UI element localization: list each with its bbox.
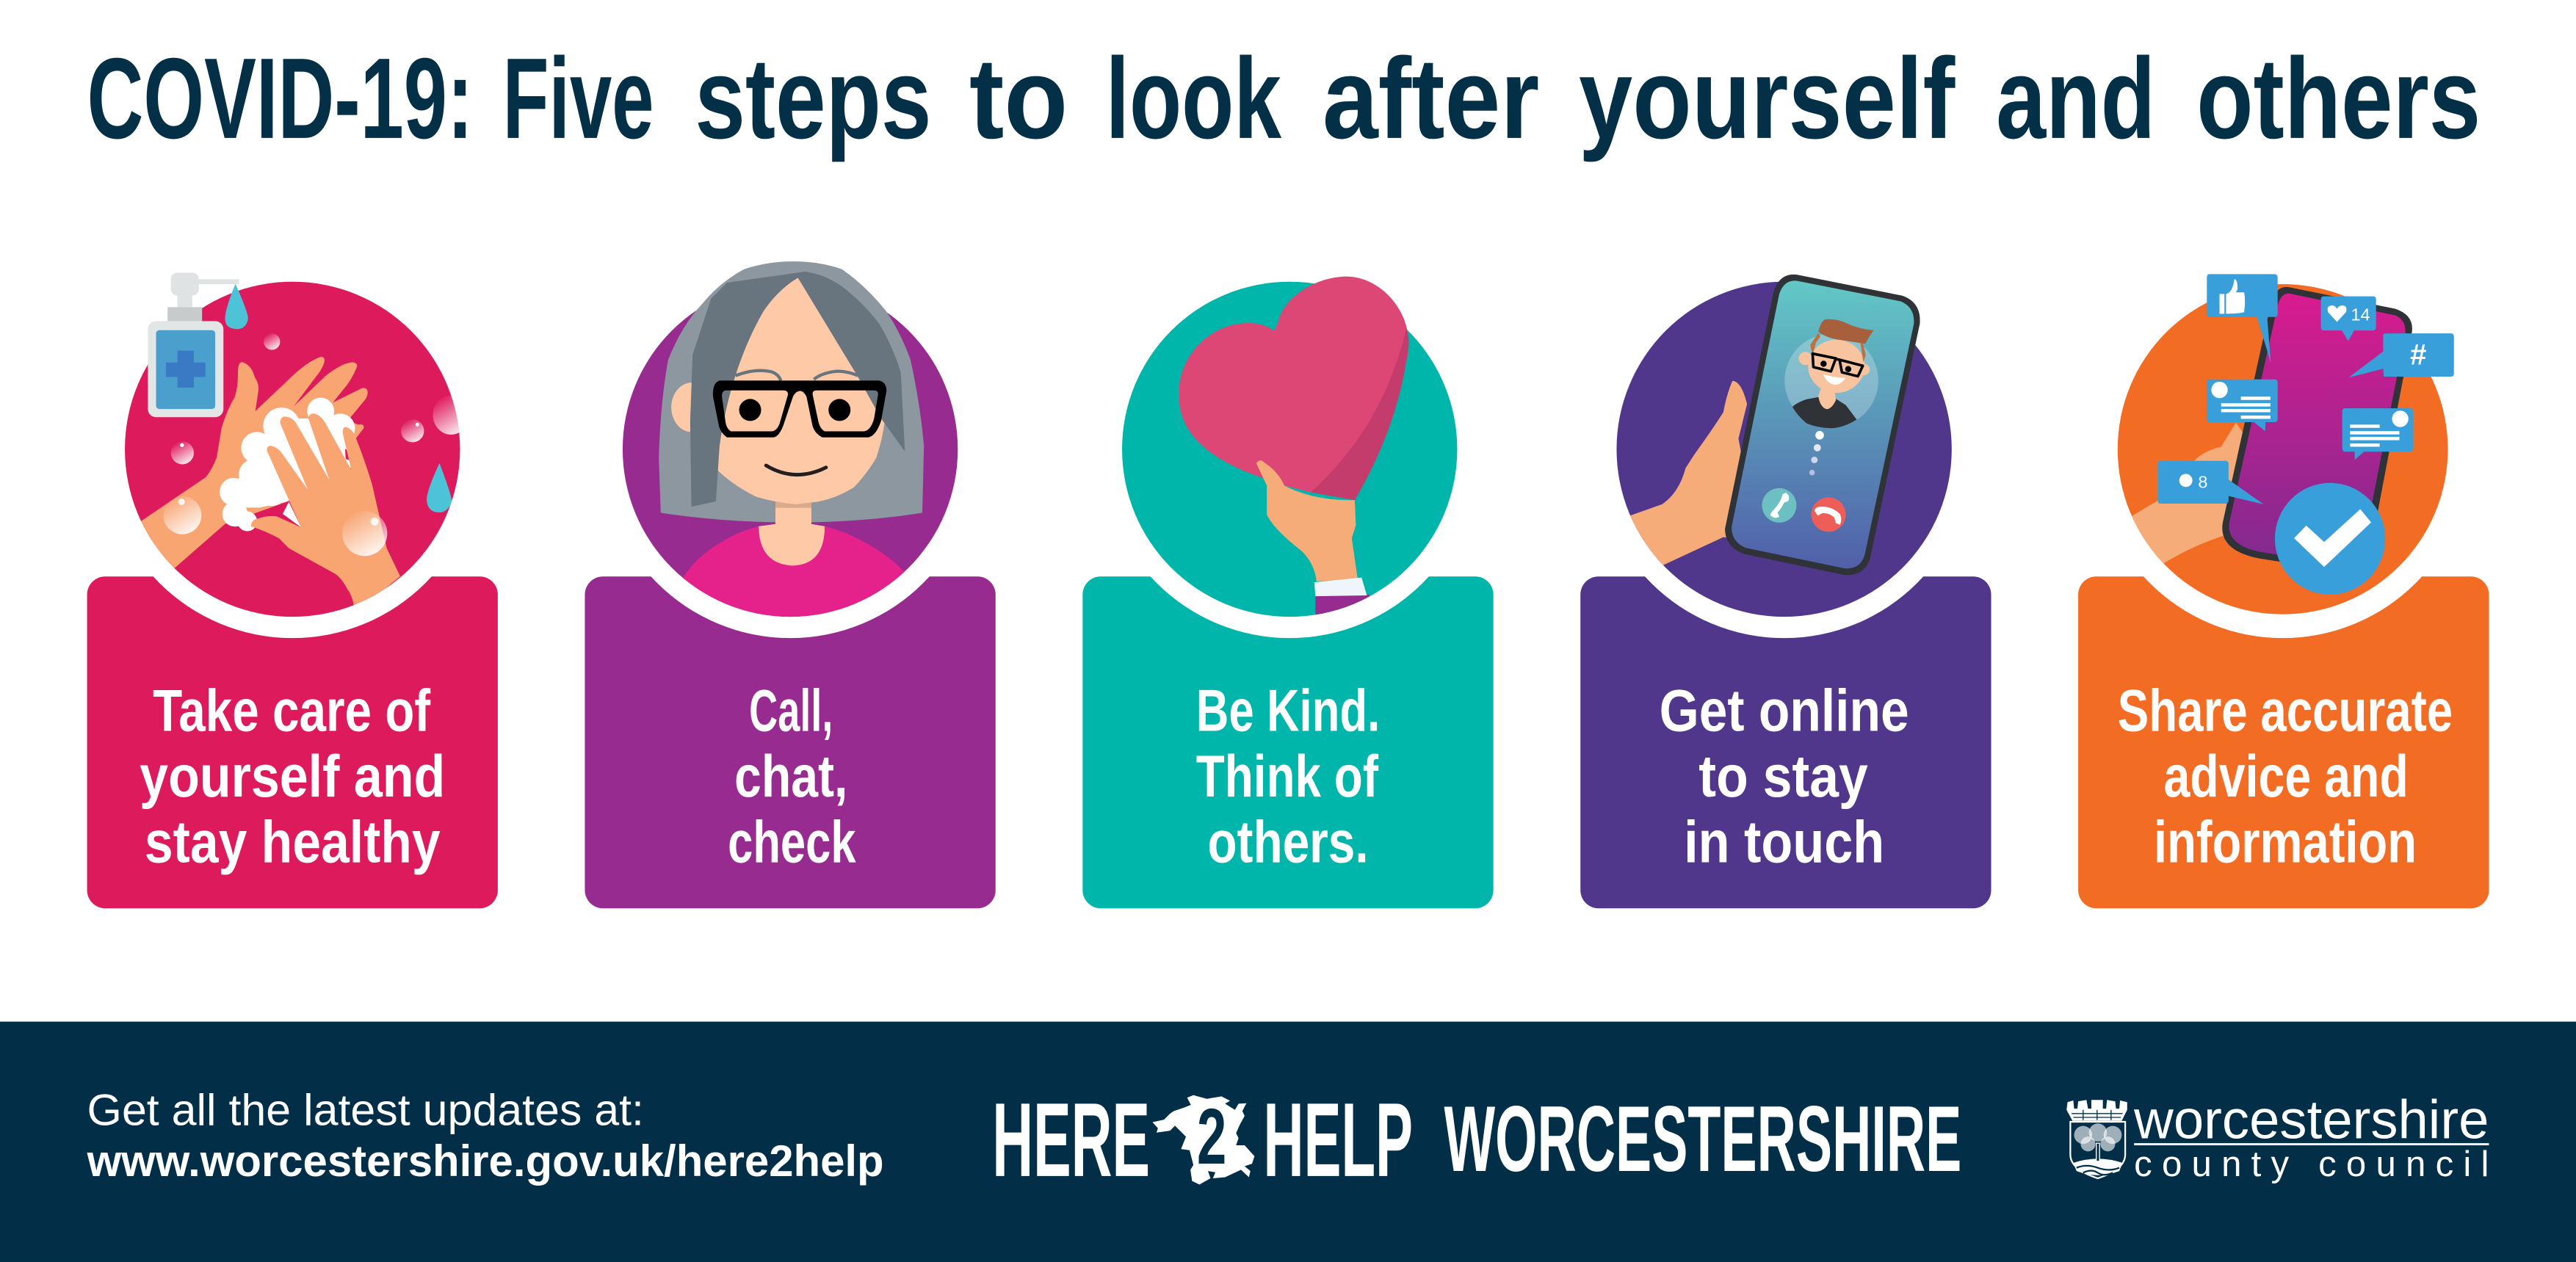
icon: soap drop [225,284,248,329]
icon: county map with 2 [1152,1092,1254,1185]
caption: take care: stay healthy [145,810,441,876]
icon: crest [2066,1100,2127,1178]
bubble: like [2207,274,2278,363]
bubble: 14 likes [2321,297,2376,341]
logo: worcestershire county council [2066,1089,2489,1184]
icon: county map with 2: 2 [1197,1092,1226,1181]
title: and [1996,35,2155,163]
caption: share accurate: Share accurate [2118,678,2453,744]
caption: be kind: Think of [1196,744,1378,810]
icon: decline call [1812,497,1846,532]
logo: here 2 help worcestershire: WORCESTERSHIRE [1444,1087,1961,1192]
caption: be kind: others. [1207,810,1369,876]
bubble: 8 comments [2157,461,2263,504]
logo: worcestershire county council: county council [2134,1144,2489,1184]
illustration: hand holding heart [1179,277,1409,632]
caption: be kind [1196,678,1380,876]
phone body [1725,275,1920,575]
caption: share accurate: information [2154,810,2417,876]
title: to [969,35,1068,163]
title: steps [695,35,932,163]
caption: call chat check [728,678,856,876]
title [87,35,2481,163]
panel: get online [1580,262,1991,908]
caption: get online [1660,678,1909,876]
illustration: phone with social posts [2111,274,2454,595]
logo: here 2 help worcestershire: HELP [1263,1081,1413,1199]
bubble: comment left [2207,380,2278,431]
caption: call chat check: Call, [749,678,833,744]
caption: share accurate [2118,678,2453,876]
panel: take care of yourself [87,262,498,908]
caption: be kind: Be Kind. [1196,678,1380,744]
title: after [1323,35,1539,163]
logo: here 2 help worcestershire: HERE [992,1081,1150,1199]
logo: here 2 help worcestershire [992,1081,1961,1199]
caption: take care [140,678,445,876]
footer: updates link [87,1085,884,1186]
title: COVID-19: [87,35,473,163]
caption: take care: Take care of [153,678,430,744]
illustration: woman with glasses [659,261,924,632]
title: yourself [1579,35,1955,163]
icon: check mark [2275,483,2385,595]
caption: get online: Get online [1660,678,1909,744]
footer: updates link: www.worcestershire.gov.uk/here2help [87,1136,884,1186]
caption: call chat check: check [728,810,856,876]
phone body [2222,287,2412,575]
caption: get online: in touch [1684,810,1884,876]
icon: sanitiser bottle [148,272,239,417]
caption: take care: yourself and [140,744,445,810]
logo: worcestershire county council: worcestershire [2133,1089,2489,1150]
panel: share accurate information [2078,262,2489,908]
bubble: 8 comments: 8 [2198,472,2207,491]
panel: call chat check [585,261,996,908]
footer: updates link: Get all the latest updates at: [87,1085,644,1135]
bubble: comment right [2342,408,2414,460]
illustration: video call [1618,275,1920,575]
contact portrait [1784,319,1878,428]
title: look [1106,35,1282,163]
caption: get online: to stay [1698,744,1868,810]
title: Five [503,35,654,163]
footer band [0,1022,2576,1262]
icon: answer call [1762,488,1796,523]
illustration: washing hands [131,272,469,611]
bubble: 14 likes: 14 [2351,305,2370,324]
title: others [2196,35,2481,163]
panel: be kind [1082,262,1494,908]
bubble: hashtag [2349,333,2454,377]
bubble: hashtag: # [2410,338,2426,371]
caption: call chat check: chat, [734,744,847,810]
caption: share accurate: advice and [2163,744,2409,810]
